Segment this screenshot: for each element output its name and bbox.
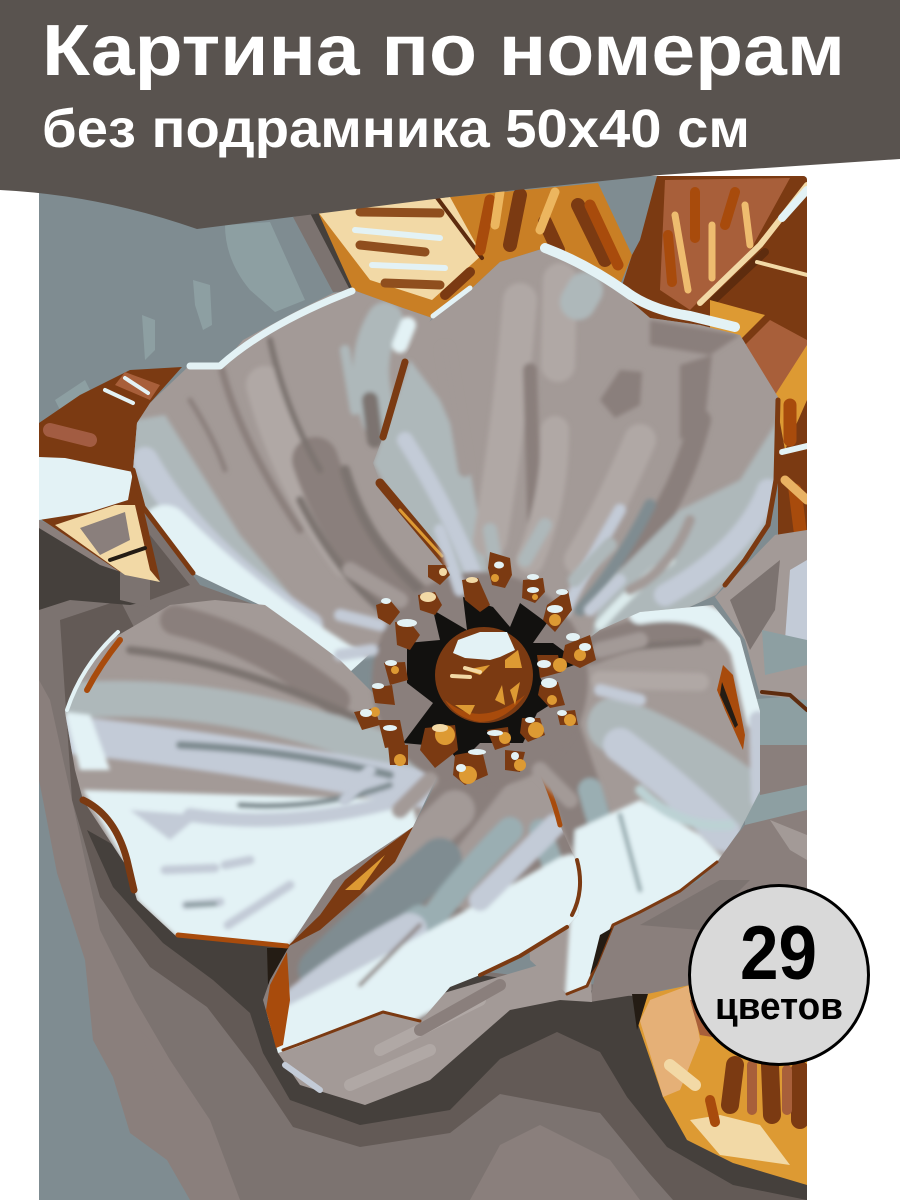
bottom petal copper band upper-left xyxy=(287,827,413,947)
leaf shadow at top xyxy=(293,214,349,292)
leaf: top golden xyxy=(318,183,632,318)
lower-left petal copper edge top xyxy=(87,640,120,690)
leaf: left copper xyxy=(39,367,182,582)
stamen thread to petal xyxy=(542,779,562,828)
leaf: top right copper xyxy=(620,176,807,540)
lower-left petal copper edge left xyxy=(83,800,134,890)
subtitle: без подрамника 50х40 см xyxy=(42,99,750,159)
right-lower petal copper slit xyxy=(717,665,745,750)
top-right petal golden edge xyxy=(400,510,442,556)
badge: 29 colours xyxy=(690,886,868,1064)
right-lower petal dark fold xyxy=(590,928,612,975)
bottom petal copper lower-left xyxy=(266,952,290,1048)
petal: top right xyxy=(370,245,785,665)
petal throat behind stamens xyxy=(340,525,640,810)
top-right petal right edge xyxy=(725,400,778,585)
right-lower petal dark slit xyxy=(720,682,738,728)
top-left petal copper edge xyxy=(133,470,193,573)
pistil xyxy=(435,627,533,723)
lower-left petal white rim xyxy=(67,632,118,710)
flower centre: dark core xyxy=(403,597,580,763)
painting background xyxy=(39,170,807,1200)
title: Картина по номерам xyxy=(42,11,845,91)
petal: lower left xyxy=(60,595,445,955)
petal: top left xyxy=(130,285,460,685)
leaf: bottom right golden xyxy=(632,985,807,1185)
header banner xyxy=(0,0,900,229)
bottom petal right edge xyxy=(480,860,580,975)
top-left petal white rim xyxy=(190,291,352,366)
bottom petal rim xyxy=(283,1012,420,1050)
badge number: 29 xyxy=(740,911,817,996)
badge label: цветов xyxy=(715,986,843,1028)
stamens xyxy=(354,552,596,785)
top-right petal copper edges xyxy=(383,362,405,437)
top-right petal lower copper edge xyxy=(380,483,447,563)
right-lower petal bottom edge xyxy=(567,862,717,994)
top-right petal upper-left rim xyxy=(433,288,470,316)
bottom petal golden highlight xyxy=(345,855,385,890)
painting: flower on grey-blue background xyxy=(39,170,807,1200)
petal behind right xyxy=(715,530,807,710)
shadow petal below flower xyxy=(278,966,592,1105)
lower-left petal bottom edge xyxy=(178,935,287,946)
top-right petal white rim xyxy=(545,248,735,327)
petal: right lower xyxy=(515,600,765,1000)
petal: bottom xyxy=(263,778,582,1053)
